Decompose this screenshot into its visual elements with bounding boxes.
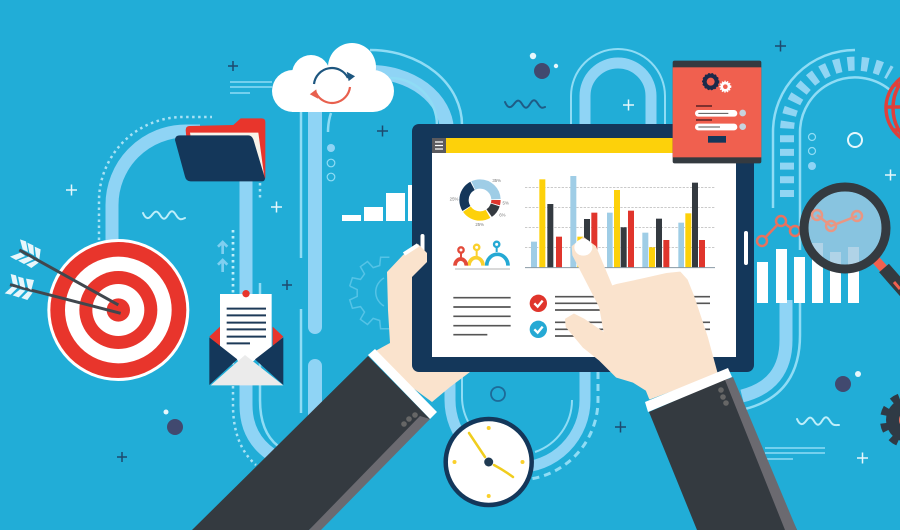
mini bar chart: [342, 185, 414, 221]
decorative plus signs: [66, 40, 896, 464]
white bar chart with trend line: [757, 215, 859, 303]
tablet side buttons: [422, 233, 746, 263]
card gears: [703, 74, 731, 92]
icon: gear bottom right: [884, 396, 900, 444]
screen header: [432, 138, 674, 153]
text lines left: [453, 298, 511, 335]
tablet screen: [432, 138, 736, 357]
people icons: [455, 242, 510, 269]
donut chart: 25%: [475, 222, 484, 227]
tablet body: [412, 124, 754, 372]
bar chart: [525, 176, 715, 268]
donut chart: 6%: [499, 212, 506, 217]
checklist: [530, 295, 710, 338]
screen contents: [450, 176, 715, 338]
icon: magnifying glass: [804, 187, 900, 292]
card form fields: [695, 106, 746, 143]
dotted line beside envelope: [232, 230, 234, 350]
pointing right hand: [566, 238, 717, 398]
wavy lines: [143, 100, 839, 425]
icon: target with arrows: [5, 239, 189, 381]
up arrows: [218, 242, 227, 272]
icon: red wheel: [886, 71, 900, 145]
donut chart: 25%: [450, 197, 458, 202]
icon: cloud with sync arrows: [272, 43, 394, 112]
donut chart: 35%: [492, 178, 501, 183]
icon: folder: [175, 118, 265, 181]
tablet: [412, 124, 754, 372]
left sleeve: [192, 349, 437, 530]
settings card: [673, 61, 761, 163]
donut chart: 5%: [503, 200, 509, 205]
donut chart: [450, 178, 509, 227]
icon: clock: [446, 419, 532, 505]
icon: envelope with letter: [209, 290, 283, 385]
left hand palm: [368, 244, 470, 402]
small dots and circles: [164, 53, 862, 435]
left thumb: [403, 244, 427, 290]
right sleeve: [645, 368, 797, 530]
